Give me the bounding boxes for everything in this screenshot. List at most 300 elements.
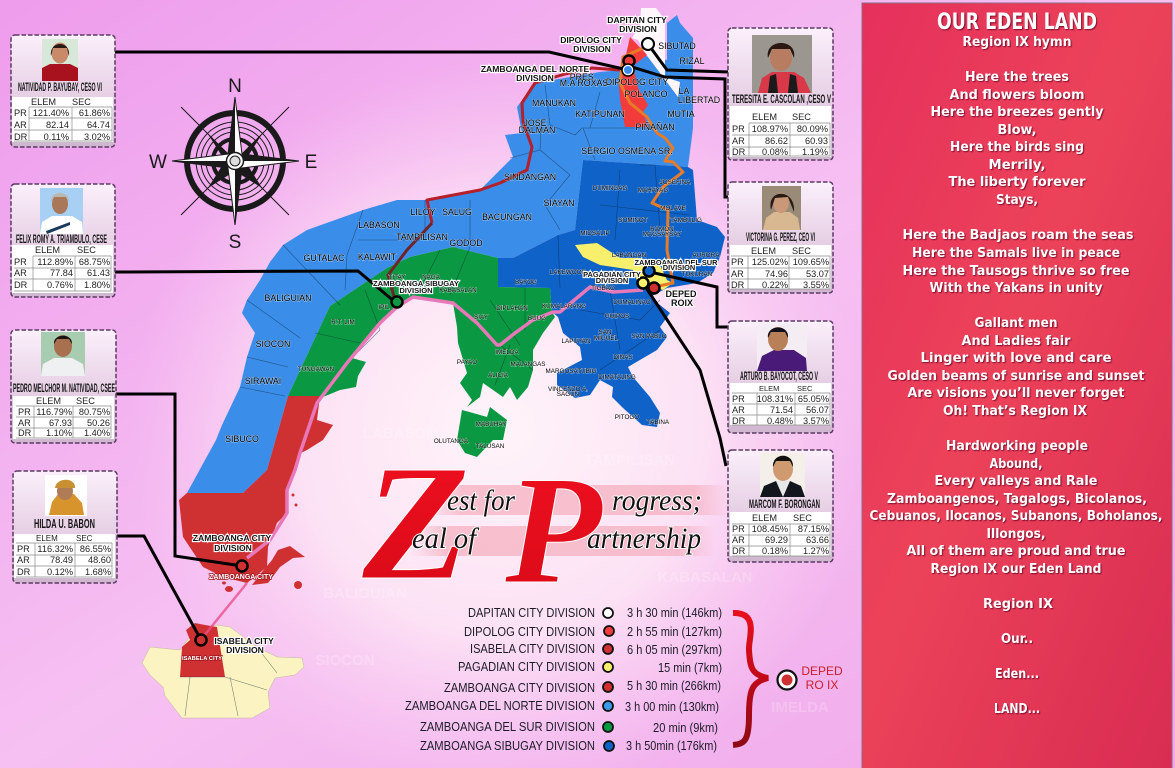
- town labels: LA: [679, 86, 690, 96]
- town labels: TUNGAWAN: [298, 366, 335, 373]
- portrait: [760, 453, 805, 497]
- hymn verse 1: Here the birds sing: [950, 140, 1084, 155]
- legend times: 2 h 55 min (127km): [627, 625, 722, 639]
- DepEd RO IX marker: [778, 664, 843, 692]
- data table: 63.66: [806, 535, 829, 545]
- town labels: LILOY: [411, 207, 436, 217]
- hymn verse 4: Region IX our Eden Land: [930, 562, 1102, 577]
- data table: 1.19%: [802, 147, 828, 157]
- legend names: PAGADIAN CITY DIVISION: [458, 660, 595, 674]
- DepEd RO IX marker: DEPED: [801, 664, 843, 678]
- hymn verse 1: Merrily,: [988, 158, 1046, 173]
- data table: AR: [14, 268, 27, 278]
- hymn verse 4: Cebuanos, Ilocanos, Subanons, Boholanos,: [870, 509, 1162, 524]
- town labels: JOSE: [524, 118, 547, 128]
- data table: DR: [732, 416, 746, 426]
- data table: 86.62: [765, 136, 788, 146]
- data table: 87.15%: [798, 524, 829, 534]
- background: BALIGUIAN: [323, 585, 407, 602]
- portrait: [752, 35, 812, 93]
- data table: SEC: [76, 534, 93, 543]
- town labels: LAKEWOOD: [550, 269, 587, 276]
- legend times: 3 h 00 min (130km): [625, 700, 719, 714]
- data table: SEC: [793, 513, 812, 523]
- data table: 125.02%: [752, 257, 788, 267]
- hymn ending: Eden...: [995, 667, 1039, 682]
- data table: 3.57%: [803, 416, 829, 426]
- background: LABASON: [363, 425, 437, 442]
- division labels: DIVISION: [226, 645, 264, 655]
- data table: 0.18%: [762, 546, 788, 556]
- division labels: [193, 15, 718, 655]
- data table: SEC: [792, 246, 811, 256]
- legend names: ISABELA CITY DIVISION: [470, 642, 595, 656]
- town labels: SINDANGAN: [504, 172, 556, 182]
- data table: DR: [14, 132, 28, 142]
- town labels: KABASALAN: [439, 287, 477, 294]
- hymn verse 2: With the Yakans in unity: [930, 281, 1103, 296]
- hymn verse 1: Here the breezes gently: [930, 105, 1104, 120]
- data table: 82.14: [46, 120, 69, 130]
- slogan text: eal of: [412, 522, 479, 555]
- town labels: MALANGAS: [510, 361, 546, 368]
- hymn subtitle: Region IX hymn: [962, 35, 1072, 50]
- route: ferry to Isabela: [203, 583, 247, 637]
- portrait: [45, 475, 87, 516]
- slogan bands: [410, 485, 730, 556]
- data table: 1.10%: [46, 428, 72, 438]
- data table: 61.86%: [79, 108, 110, 118]
- region: Zamboanga del Sur (dark blue): [498, 160, 725, 427]
- compass rose: [149, 76, 317, 253]
- town labels: TAMBULIG: [670, 217, 702, 224]
- portrait: [41, 332, 85, 376]
- town labels: NAGA: [422, 274, 441, 281]
- portrait: [757, 324, 807, 371]
- division labels: ZAMBOANGA DEL SUR: [635, 258, 718, 267]
- town labels: M.A ROXAS: [560, 78, 608, 88]
- data table: 1.80%: [84, 280, 110, 290]
- town labels: TAMPILISAN: [396, 232, 448, 242]
- town labels: LABANGAN: [612, 252, 647, 259]
- hymn verse 2: Here the Badjaos roam the seas: [902, 228, 1134, 243]
- town labels: PIÑAÑAN: [635, 122, 675, 132]
- legend times: 3 h 50min (176km): [626, 739, 717, 753]
- data table: 0.22%: [762, 280, 788, 290]
- town labels: JOSEFINA: [660, 179, 691, 186]
- data table: 1.40%: [84, 428, 110, 438]
- data table: [14, 534, 115, 578]
- town labels: MIGUEL: [594, 335, 619, 342]
- town labels: TABINA: [647, 419, 670, 426]
- data table: PR: [732, 124, 745, 134]
- division labels: DIVISION: [573, 44, 611, 54]
- data table: 108.97%: [752, 124, 788, 134]
- route: Dipolog to Sibugay (dark red): [427, 68, 620, 223]
- data table: 0.12%: [47, 567, 73, 577]
- town labels: DUMINGAG: [593, 185, 627, 192]
- portrait: [42, 39, 78, 81]
- region: Zamboanga City (red): [179, 396, 333, 583]
- compass rings: [181, 107, 289, 215]
- data table: 50.26: [87, 418, 110, 428]
- compass star: [172, 97, 299, 225]
- legend times: 6 h 05 min (297km): [627, 643, 722, 657]
- data table: 108.31%: [757, 394, 793, 404]
- town labels: MIDSALIP: [580, 230, 610, 237]
- hymn verse 4: Hardworking people: [946, 439, 1088, 454]
- portrait: [40, 188, 83, 234]
- data table: 56.07: [806, 405, 829, 415]
- town labels: SIAYAN: [544, 198, 574, 208]
- hymn verse 2: Here the Tausogs thrive so free: [902, 264, 1130, 279]
- compass letters: W: [149, 152, 167, 173]
- town labels: MUTIA: [667, 109, 695, 119]
- data table: [13, 396, 114, 439]
- bracket: [733, 613, 768, 745]
- town labels: DALMAN: [519, 125, 555, 135]
- town labels: TALUSAN: [476, 443, 505, 450]
- town labels: PRES.: [570, 72, 596, 82]
- town labels: VINCENZO A.: [548, 386, 588, 393]
- hymn ending: Region IX: [983, 597, 1053, 612]
- data table: 0.11%: [44, 132, 69, 142]
- hymn verse 3: Are visions you’ll never forget: [908, 386, 1124, 401]
- card: Victorina G. Perez: [728, 182, 833, 293]
- data table: ELEM: [36, 396, 61, 406]
- town labels: SERGIO OSMENA SR.: [581, 146, 673, 156]
- division labels: DIVISION: [214, 543, 252, 553]
- compass letters: [149, 76, 317, 253]
- hymn title: OUR EDEN LAND: [937, 10, 1097, 35]
- card: Natividad P. Bayubay: [11, 35, 115, 147]
- data table: 109.65%: [793, 257, 829, 267]
- data table: SEC: [797, 384, 813, 393]
- data table: 80.75%: [79, 407, 110, 417]
- region: Zamboanga del Norte (light blue): [187, 15, 693, 493]
- data table: AR: [18, 418, 31, 428]
- town labels: DIPLAHAN: [496, 305, 528, 312]
- data table: 116.32%: [37, 544, 73, 554]
- hymn ending: LAND...: [994, 702, 1040, 717]
- legend: travel times: [405, 606, 843, 753]
- data table: DR: [732, 546, 746, 556]
- hymn verse 4: Illongos,: [986, 527, 1046, 542]
- division labels: DIVISION: [663, 263, 695, 272]
- region: Pagadian City (yellow): [575, 243, 673, 290]
- data table: 121.40%: [33, 108, 69, 118]
- hymn ending: [983, 597, 1053, 717]
- data table: 0.76%: [47, 280, 73, 290]
- panel: hymn: [862, 3, 1172, 768]
- division labels: ROIX: [671, 298, 693, 308]
- legend markers: [603, 608, 614, 751]
- data table: PR: [18, 407, 31, 417]
- data table: SEC: [792, 112, 811, 122]
- route: Dipolog/Dapitan to DepEd RO IX (orange): [620, 48, 683, 287]
- hymn verse 2: Here the Samals live in peace: [912, 246, 1120, 261]
- division labels: DIVISION: [399, 286, 433, 295]
- municipal boundaries: [180, 85, 690, 716]
- card: Natividad P. Bayubay: NATIVIDAD P. BAYUBAY, CESO VI: [18, 80, 102, 94]
- town labels: KATIPUNAN: [575, 109, 625, 119]
- hymn verse 3: Linger with love and care: [920, 351, 1112, 366]
- town labels: IPIL: [378, 304, 390, 311]
- slogan letter P: P: [504, 444, 603, 616]
- portrait: [762, 186, 801, 230]
- card: Arturo B. Bayocot: ARTURO B. BAYOCOT, CESO V: [740, 369, 818, 383]
- slogan: [361, 431, 730, 616]
- town labels: SAN PABLO: [631, 333, 667, 340]
- data table: ELEM: [759, 384, 779, 393]
- legend names: ZAMBOANGA DEL NORTE DIVISION: [405, 699, 595, 713]
- data table: 64.74: [87, 120, 110, 130]
- slogan text: est for: [447, 484, 515, 517]
- slogan text: rogress;: [612, 484, 702, 517]
- background: SIOCON: [315, 652, 375, 669]
- route: pink road along coast: [247, 287, 643, 558]
- town labels: BACUNGAN: [482, 212, 532, 222]
- hymn verse 1: Here the trees: [965, 70, 1069, 85]
- data table: SEC: [76, 396, 95, 406]
- data table: 69.29: [765, 535, 788, 545]
- town labels: SAGUN: [557, 391, 580, 398]
- region: Dipolog City (bright red): [619, 37, 648, 127]
- hymn verse 2: [902, 228, 1134, 296]
- town labels: RAMON: [650, 226, 674, 233]
- legend names: DAPITAN CITY DIVISION: [468, 606, 595, 620]
- slogan letter Z: Z: [361, 431, 470, 614]
- data table: [730, 106, 831, 157]
- data table: [730, 245, 831, 290]
- town labels: LAPUYAN: [562, 338, 591, 345]
- connector lines: [115, 44, 729, 640]
- division labels: DIVISION: [619, 24, 657, 34]
- town labels: MOLAVE: [660, 205, 686, 212]
- hymn verse 3: Gallant men: [974, 316, 1058, 331]
- town labels: DIPOLOG CITY: [606, 77, 668, 87]
- data table: PR: [17, 544, 30, 554]
- background: IMELDA: [771, 699, 829, 716]
- legend times: 5 h 30 min (266km): [627, 679, 721, 693]
- town labels: AURORA: [693, 252, 720, 259]
- division labels: PAGADIAN CITY: [583, 270, 641, 279]
- town labels: GODOD: [449, 238, 483, 248]
- town labels: SAN: [599, 329, 612, 336]
- town labels: SIRAWAI: [245, 376, 281, 386]
- town labels: R.T. LIM: [331, 319, 355, 326]
- town labels: ALICIA: [488, 372, 509, 379]
- town labels: MAHAYAG: [638, 187, 668, 194]
- data table: SEC: [77, 245, 96, 255]
- town labels: SIBUTAD: [658, 41, 696, 51]
- text: PEDRO MELCHOR M. NATIVIDAD, CSEE: [13, 381, 115, 395]
- data table: [730, 383, 831, 426]
- hymn verse 3: Oh! That’s Region IX: [943, 404, 1087, 419]
- region: Olutanga island (green): [457, 407, 507, 457]
- data table: ELEM: [35, 245, 60, 255]
- town labels: MARGOSATUBIG: [546, 368, 597, 375]
- card: Marcom F. Borongan: [728, 450, 833, 562]
- data table: 65.05%: [798, 394, 829, 404]
- town labels: DINAS: [613, 354, 633, 361]
- region: Zamboanga Sibugay (green): [288, 247, 555, 407]
- hymn verse 1: And flowers bloom: [950, 88, 1084, 103]
- division labels: DEPED: [665, 289, 697, 299]
- town labels: OLUTANGA: [434, 438, 469, 445]
- data table: 77.84: [50, 268, 73, 278]
- data table: AR: [731, 269, 744, 279]
- data table: 0.48%: [767, 416, 793, 426]
- data table: ELEM: [752, 513, 777, 523]
- data table: [730, 512, 831, 556]
- card: Teresita E. Cascolan: TERESITA E. CASCOLAN ,CESO V: [732, 92, 831, 106]
- town labels: BALIGUIAN: [265, 293, 311, 303]
- hymn verse 4: All of them are proud and true: [906, 544, 1126, 559]
- legend times: 20 min (9km): [653, 721, 718, 735]
- town labels: KUMALARANG: [542, 303, 586, 310]
- data table: 78.49: [50, 555, 73, 565]
- region: Isabela City (red): [180, 623, 225, 677]
- hymn verse 4: Every valleys and Rale: [934, 474, 1098, 489]
- town labels: BAYOG: [515, 279, 537, 286]
- data table: 48.60: [88, 555, 111, 565]
- town labels: GUTALAC: [304, 253, 345, 263]
- data table: PR: [732, 394, 745, 404]
- division labels: DIVISION: [596, 276, 628, 285]
- DepEd RO IX marker: RO IX: [806, 678, 838, 692]
- data table: AR: [17, 555, 30, 565]
- data table: DR: [731, 280, 745, 290]
- legend names: [405, 606, 595, 753]
- hymn verse 4: Abound,: [990, 457, 1042, 472]
- card: Victorina G. Perez: VICTORINA G. PEREZ, CEO VI: [746, 230, 815, 244]
- legend names: ZAMBOANGA CITY DIVISION: [444, 681, 595, 695]
- hymn verse 4: Zamboangenos, Tagalogs, Bicolanos,: [887, 492, 1147, 507]
- town labels: SIBUCO: [225, 434, 259, 444]
- town labels: TITAY: [389, 274, 406, 281]
- data table: 3.55%: [803, 280, 829, 290]
- town labels: LABASON: [358, 220, 400, 230]
- division labels: DIVISION: [516, 73, 554, 83]
- data table: 60.93: [805, 136, 828, 146]
- town labels: SALUG: [442, 207, 472, 217]
- card: Arturo B. Bayocot: [728, 321, 833, 433]
- data table: 1.68%: [85, 567, 111, 577]
- town labels: MAGSAYSAY: [643, 231, 682, 238]
- town labels: IMELDA: [495, 349, 520, 356]
- town labels: MANUKAN: [532, 98, 576, 108]
- data table: 1.27%: [803, 546, 829, 556]
- compass letters: E: [305, 152, 317, 173]
- data table: DR: [18, 428, 32, 438]
- text: FELIX ROMY A. TRIAMBULO, CESE: [16, 232, 107, 246]
- legend names: ZAMBOANGA SIBUGAY DIVISION: [420, 739, 595, 753]
- hymn verse 1: Stays,: [996, 193, 1038, 208]
- hymn verse 3: Golden beams of sunrise and sunset: [888, 369, 1144, 384]
- data table: ELEM: [31, 97, 56, 107]
- data table: PR: [14, 257, 27, 267]
- town labels: GUIPOS: [605, 313, 629, 320]
- division labels: ZAMBOANGA DEL NORTE: [481, 64, 589, 74]
- icon: small red islets: [222, 494, 302, 592]
- data table: 116.79%: [36, 407, 72, 417]
- data table: 68.75%: [79, 257, 110, 267]
- division labels: ISABELA CITY: [214, 636, 274, 646]
- town labels: TIGBAO: [591, 285, 615, 292]
- data table: 80.09%: [797, 124, 828, 134]
- data table: 61.43: [87, 268, 110, 278]
- slogan text: artnership: [587, 522, 701, 555]
- data table: AR: [732, 535, 745, 545]
- town labels: PAYAO: [457, 359, 477, 366]
- hymn verse 1: [930, 70, 1104, 208]
- town labels: LIBERTAD: [678, 95, 720, 105]
- division labels: ZAMBOANGA CITY: [193, 533, 271, 543]
- town labels: RIZAL: [680, 56, 705, 66]
- data table: SEC: [72, 97, 91, 107]
- data table: DR: [17, 567, 31, 577]
- data table: [12, 97, 113, 142]
- division labels: ZAMBOANGA SIBUGAY: [373, 279, 459, 288]
- legend times: 15 min (7km): [658, 661, 722, 675]
- hymn verse 1: Blow,: [998, 123, 1036, 138]
- town labels: PITOGO: [615, 414, 639, 421]
- data table: ELEM: [36, 534, 58, 543]
- card: Teresita E. Cascolan: [728, 28, 833, 160]
- division markers: [196, 38, 660, 646]
- data table: ELEM: [752, 112, 777, 122]
- map of Region IX: [115, 8, 729, 718]
- data table: AR: [732, 136, 745, 146]
- town labels: POLANCO: [624, 89, 668, 99]
- data table: AR: [732, 405, 745, 415]
- data table: PR: [732, 524, 745, 534]
- hymn verse 3: And Ladies fair: [962, 334, 1071, 349]
- data table: [12, 245, 113, 293]
- town labels: BUUG: [528, 315, 546, 322]
- legend times: [625, 606, 722, 753]
- data table: DR: [732, 147, 746, 157]
- data table: PR: [14, 108, 27, 118]
- region: Sacol island (red): [252, 546, 305, 585]
- data table: 74.96: [765, 269, 788, 279]
- hymn verse 1: The liberty forever: [948, 175, 1086, 190]
- card: Pedro Melchor M. Natividad: [11, 330, 116, 443]
- card: Marcom F. Borongan: MARCOM F. BORONGAN: [749, 497, 820, 511]
- legend names: ZAMBOANGA DEL SUR DIVISION: [420, 720, 595, 734]
- region: Basilan (cream): [142, 625, 304, 718]
- data table: DR: [14, 280, 28, 290]
- data table: 53.07: [806, 269, 829, 279]
- card: Hilda U. Babon: HILDA U. BABON: [34, 516, 95, 531]
- hymn verse 4: [870, 439, 1162, 577]
- town labels: MABUHAY: [476, 421, 507, 428]
- data table: PR: [731, 257, 744, 267]
- card: Felix Romy A. Triambulo: [11, 184, 115, 297]
- town labels: [182, 41, 720, 662]
- town labels: DUMALINAO: [613, 299, 651, 306]
- town labels: SOMINOT: [618, 217, 648, 224]
- town labels: SIOCON: [256, 339, 290, 349]
- compass letters: S: [229, 232, 241, 253]
- town labels: SIAY: [474, 314, 489, 321]
- data table: 0.08%: [762, 147, 788, 157]
- division labels: DIPOLOG CITY: [560, 35, 622, 45]
- data table: 3.02%: [84, 132, 110, 142]
- data table: 86.55%: [80, 544, 111, 554]
- data table: 108.45%: [752, 524, 788, 534]
